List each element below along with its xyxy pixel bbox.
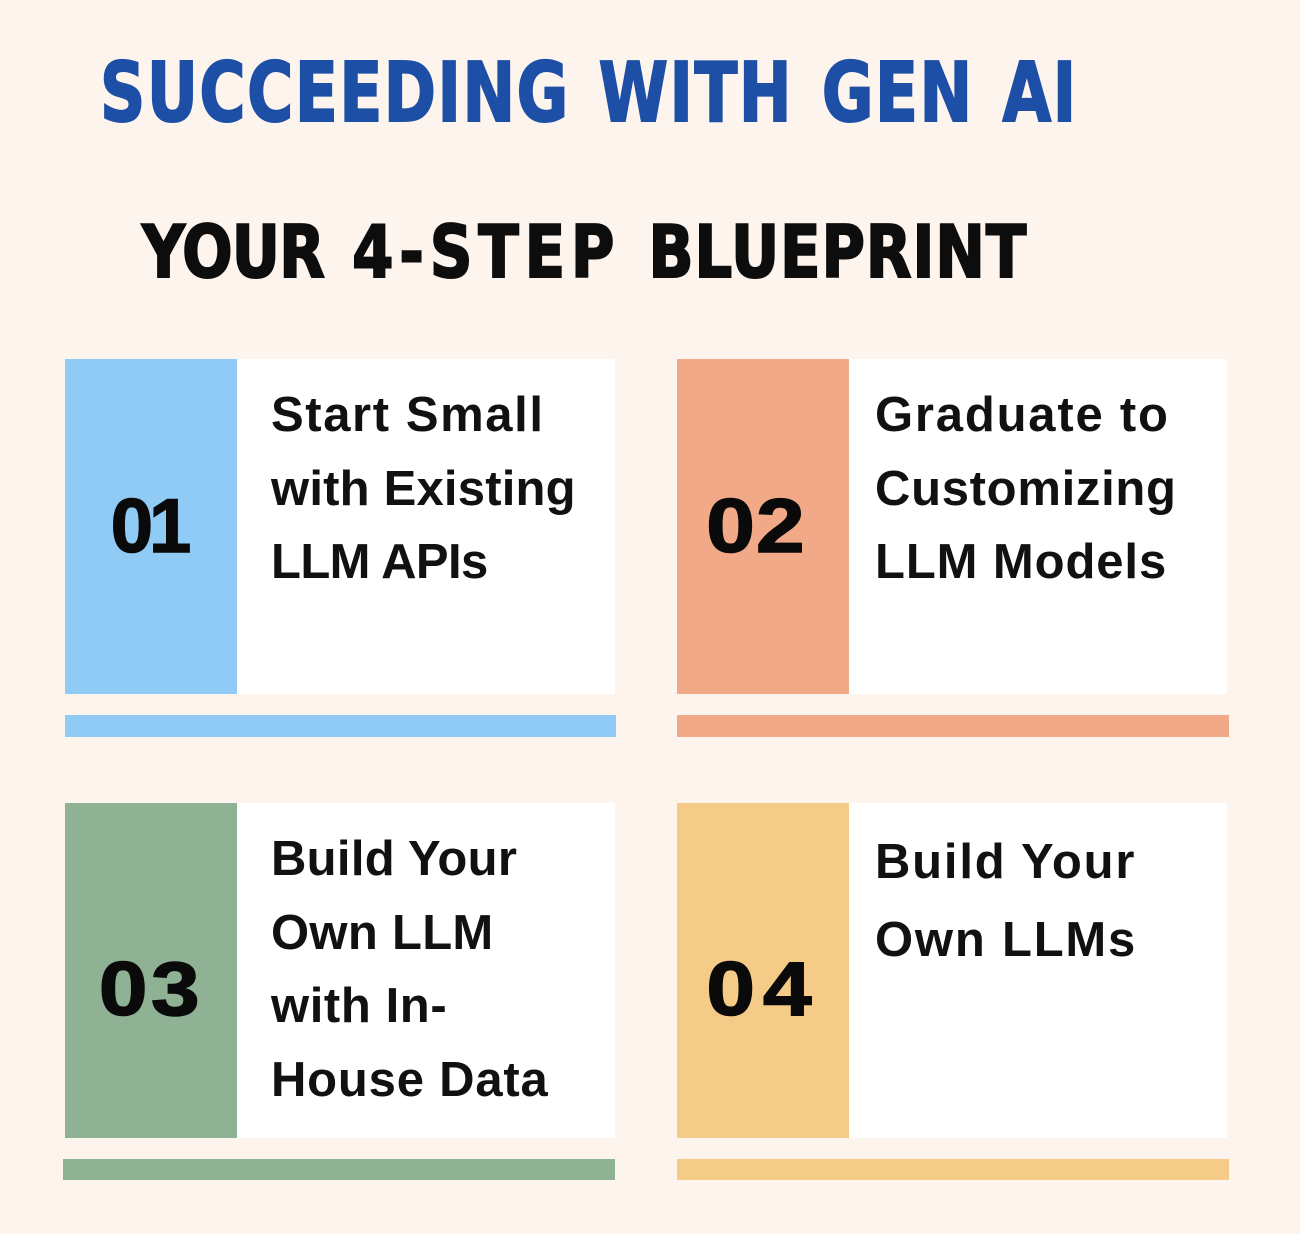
number block 03: 03 (99, 947, 203, 1032)
text: step 03: with In- (271, 979, 447, 1033)
panel: step 03 (65, 803, 615, 1138)
text: step 03: Build Your (271, 832, 517, 886)
text: step 04: Build Your (875, 835, 1136, 889)
bar: step 01 (65, 715, 616, 737)
title: SUCCEEDING WITH GEN AI (100, 46, 1078, 141)
number block 03 (65, 803, 237, 1138)
panel: step 01 (65, 359, 615, 694)
subtitle: YOUR 4-STEP BLUEPRINT (142, 210, 1027, 294)
number block 01 (65, 359, 237, 694)
bar: step 02 (677, 715, 1229, 737)
text: step 04: Own LLMs (875, 913, 1137, 967)
text: step 02: Graduate to (875, 388, 1170, 442)
number block 02 (677, 359, 849, 694)
number block 01: 01 (111, 484, 187, 568)
panel: step 04 (677, 803, 1227, 1138)
text: step 04 (875, 835, 1137, 967)
number block 04 (677, 803, 849, 1138)
text: step 03: Own LLM (271, 906, 494, 960)
text: step 02: LLM Models (875, 535, 1167, 589)
text: step 03: House Data (271, 1052, 549, 1106)
bar: step 03 (63, 1159, 615, 1180)
text: step 01: Start Small (271, 388, 545, 442)
text: step 01: LLM APIs (271, 535, 488, 589)
text: step 02 (875, 388, 1177, 589)
text: step 01: with Existing (271, 462, 576, 516)
number block 04: 04 (706, 947, 820, 1032)
panel: step 02 (677, 359, 1227, 694)
text: step 02: Customizing (875, 462, 1177, 516)
text: step 03 (270, 832, 549, 1106)
bar: step 04 (677, 1159, 1229, 1180)
text: step 01 (270, 388, 576, 589)
number block 02: 02 (706, 484, 806, 568)
